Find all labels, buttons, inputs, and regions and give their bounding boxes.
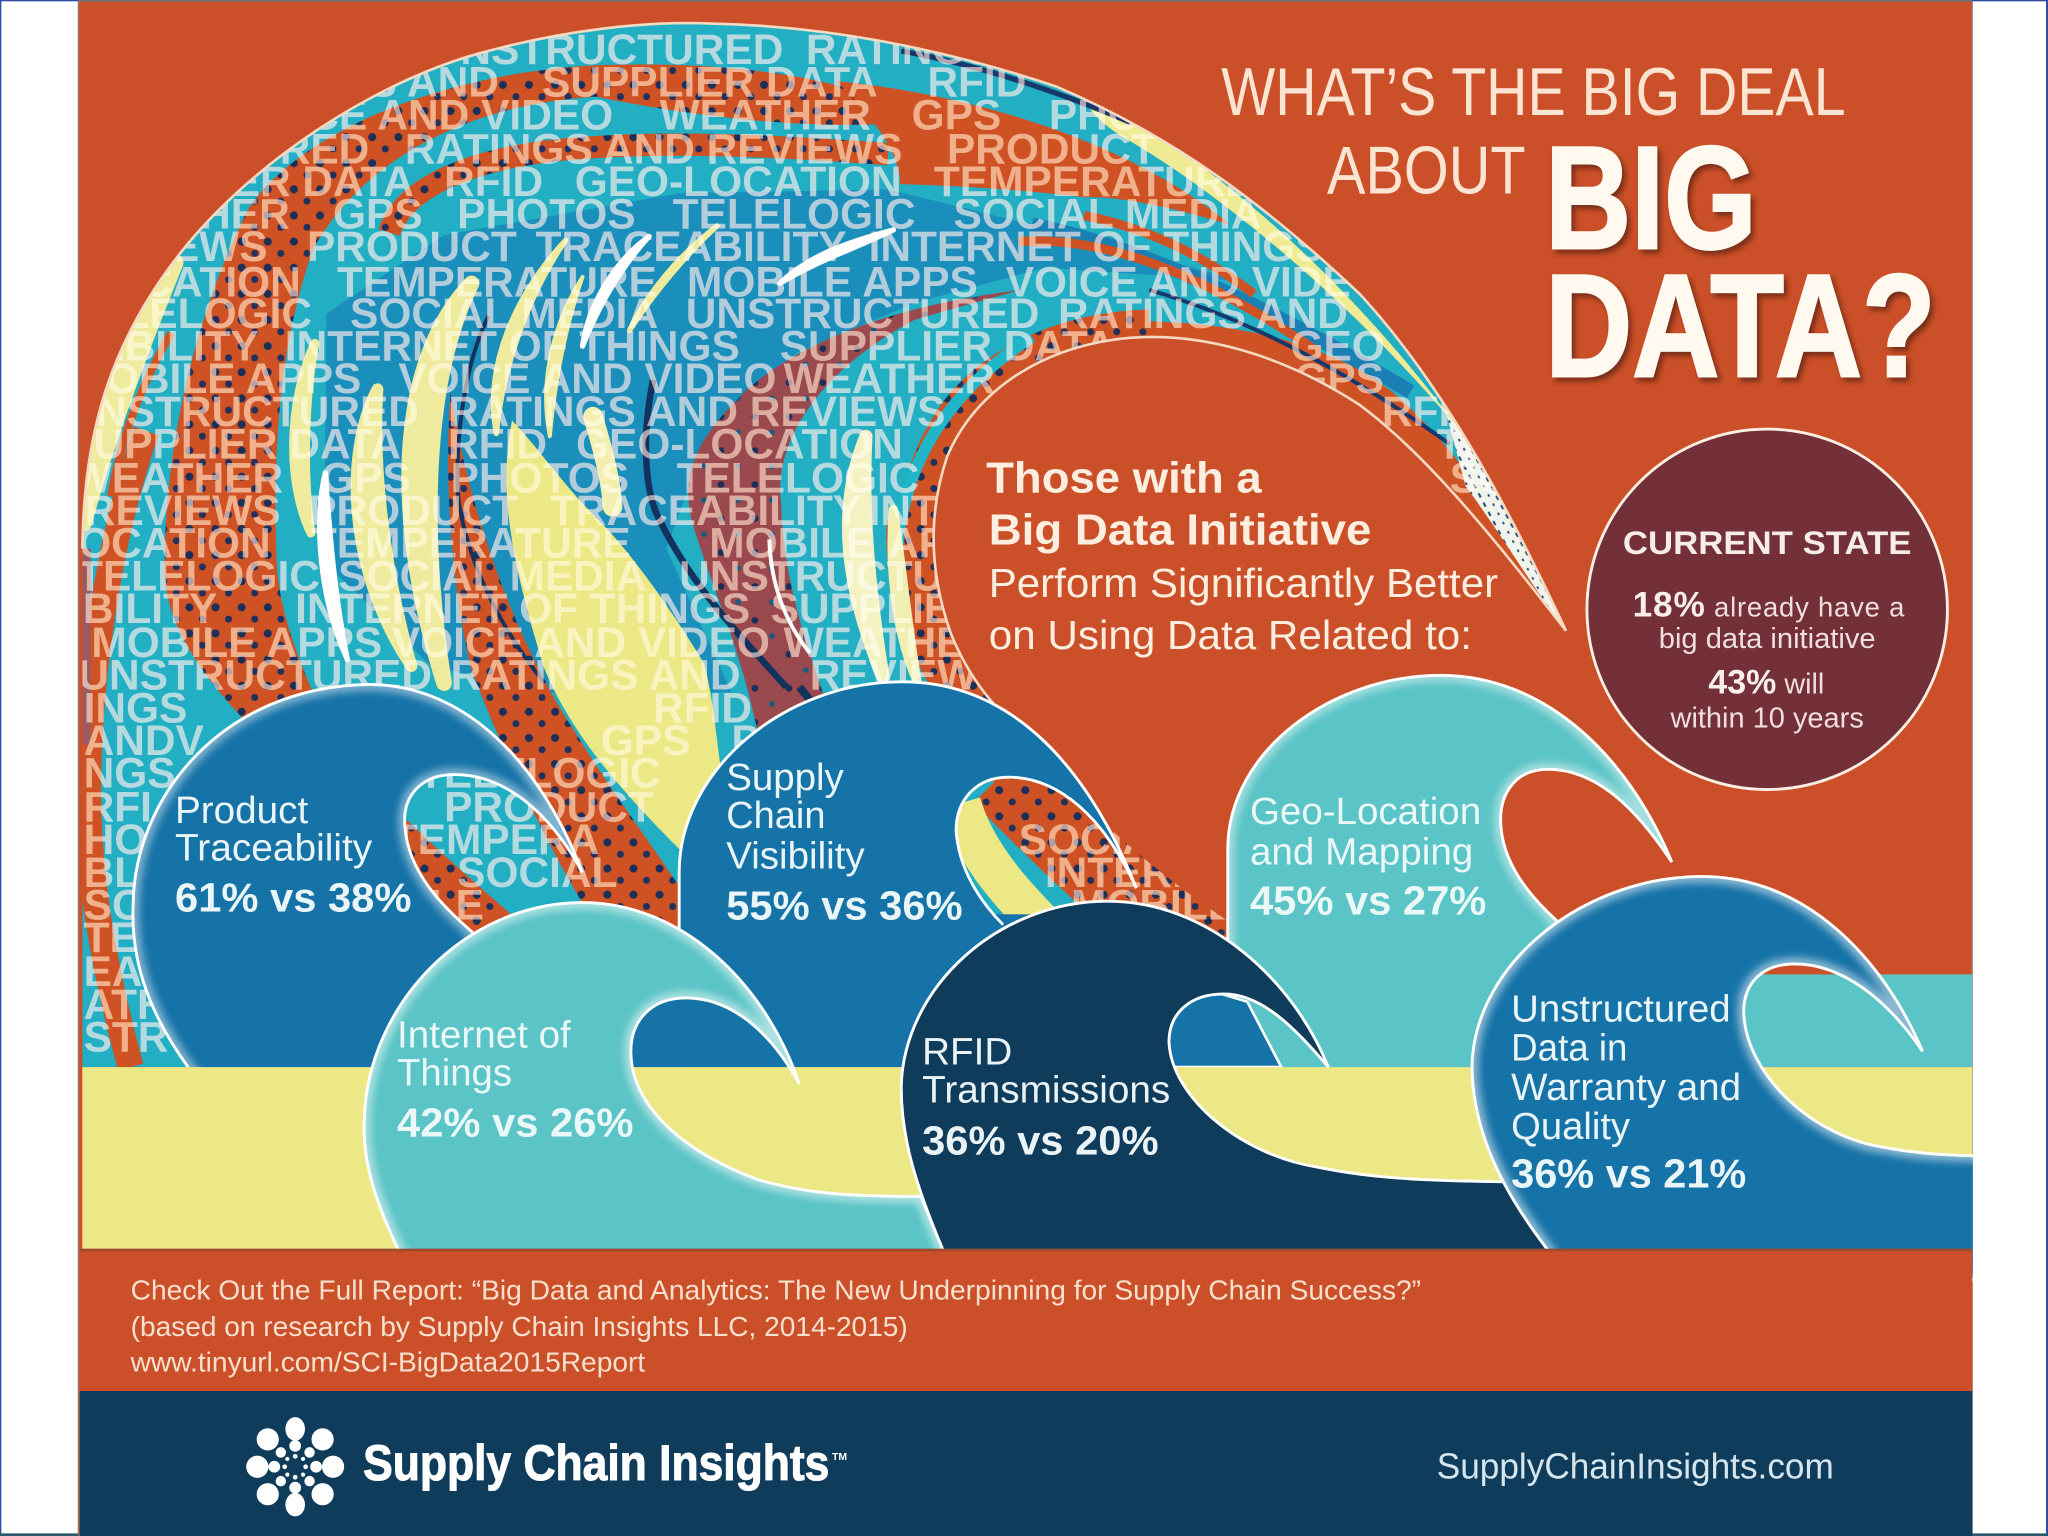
data word rows: MOBILE APPS (91, 619, 382, 666)
text: blob heading (986, 454, 1498, 658)
data word rows: RFID (444, 158, 543, 205)
wave: unstructured data in warranty and quality (1472, 876, 1998, 1280)
data word rows: TEMPERATURE (934, 158, 1254, 205)
data word rows: MOBILE (709, 520, 874, 567)
data word rows: UNSTRUCTURED (16, 125, 369, 172)
footer navy band (80, 1391, 1972, 1536)
wave: geo-location and mapping: and Mapping (1250, 832, 1473, 874)
data word rows: WEATHER (660, 91, 871, 138)
current state circle (1587, 429, 1947, 790)
data word rows: REVIEWS (85, 487, 281, 534)
data word rows: REVIEWS (810, 652, 1006, 699)
footer report band (80, 1249, 1972, 1391)
title: WHAT’S THE BIG DEAL (1221, 55, 1846, 130)
text: blob heading: Big Data Initiative (989, 507, 1371, 555)
data word rows: RATINGS AND (451, 652, 741, 699)
data word rows: RATINGS AND REVIEWS (448, 388, 945, 435)
wave: internet of things (362, 901, 941, 1249)
data word rows: GPS (601, 717, 690, 764)
data word rows: SOCIAL (1450, 454, 1610, 501)
data word rows: INTERNET OF THINGS (285, 322, 740, 369)
data word rows: RFID (653, 684, 752, 731)
logo wordmark: TM (832, 1452, 847, 1463)
data word rows: SUPPLIER DATA (780, 322, 1115, 369)
data word rows: SUPPLIER DATA (542, 59, 878, 106)
data word rows: UNSTRUCTURED (679, 552, 1033, 599)
big data wave (82, 24, 1560, 1067)
data word rows: VOICE AND VIDEO (392, 619, 770, 666)
data word rows: TEMPERATURE (311, 520, 631, 567)
data word rows: GEO-LOCATION (575, 158, 902, 205)
data word rows: RFID (927, 59, 1026, 106)
data word rows: PHOTOS (1049, 91, 1227, 138)
data word rows: TRACEABILITY (550, 487, 861, 534)
data word rows: TELELOGIC (418, 750, 661, 797)
data word rows: GEO-LOCATION (576, 420, 903, 467)
data word rows: BLE (84, 849, 168, 896)
data word rows: PHOTOS (457, 191, 636, 238)
data word rows: RFID (1382, 388, 1481, 435)
data word rows: RFID (448, 420, 547, 467)
data word rows: WEATHER (784, 355, 995, 402)
footer report band: www.tinyurl.com/SCI-BigData2015Report (130, 1346, 646, 1377)
wave: rfid transmissions: 36% vs 20% (922, 1118, 1159, 1164)
data word rows: GPS (333, 191, 423, 238)
teal band at right (1646, 974, 1972, 1067)
data word rows: RATINGS AND (1058, 290, 1348, 337)
data word rows: PHOTOS (731, 717, 910, 764)
wave: rfid transmissions (901, 901, 1567, 1280)
title: DATA? (1545, 244, 1936, 407)
data word rows: GPS (321, 454, 411, 501)
data word rows: PRODUCT (307, 223, 517, 270)
wave: supply chain visibility: Visibility (726, 836, 865, 878)
data word rows: INTERNET (1045, 849, 1257, 896)
wave: geo-location and mapping (1228, 675, 1672, 1097)
wave: product traceability: Product (175, 790, 309, 832)
current state circle: 18% already have a (1633, 585, 1905, 624)
wave: supply chain visibility (522, 682, 1136, 1071)
data word rows: SOCIAL MEDIA (338, 552, 646, 599)
wave: rfid transmissions: RFID (922, 1031, 1012, 1073)
data word rows: PHOTOS (451, 454, 629, 501)
wave: internet of things: Internet of (397, 1015, 571, 1057)
wave: supply chain visibility: 55% vs 36% (726, 883, 963, 929)
data word rows: WEATHER (784, 619, 995, 666)
data word rows: UNSTRUCTURED (78, 652, 432, 699)
data word rows: INTERNET OF THINGS (295, 585, 750, 632)
wave: product traceability: Traceability (175, 828, 372, 870)
data word rows: APPS (888, 520, 1004, 567)
data word rows: PRODUCT (444, 784, 654, 831)
title: BIG (1545, 116, 1757, 279)
text: blob heading: Perform Significantly Better (989, 560, 1498, 606)
data word rows: RATINGS AND REVIEWS (405, 125, 902, 172)
data word rows: TEL (84, 914, 164, 961)
text: blob heading: on Using Data Related to: (989, 612, 1472, 658)
wave: unstructured data in warranty and quality: 36% vs 21% (1511, 1150, 1746, 1196)
data word rows: GPS (912, 91, 1001, 138)
data word rows: SUPPLIER DATA (78, 158, 414, 205)
current state circle: CURRENT STATE (1623, 524, 1912, 561)
data word rows: INTERNET (869, 487, 1081, 534)
wave: product traceability (133, 684, 583, 1097)
icon: supply chain insights logo (246, 1417, 344, 1516)
wave: unstructured data in warranty and quality: Data in (1511, 1028, 1627, 1070)
title: ABOUT (1327, 133, 1526, 208)
data word rows: TRACEABILITY (536, 223, 847, 270)
data word rows: ABILITY (52, 585, 217, 632)
wave: geo-location and mapping: Geo-Location (1250, 791, 1481, 833)
data word rows: SUPPLIER (771, 585, 983, 632)
current state circle: within 10 years (1670, 703, 1864, 735)
current state circle: big data initiative (1659, 623, 1876, 655)
data word rows: TEMPERATURE (337, 258, 657, 305)
data word rows: WEATHER (72, 454, 283, 501)
data word rows: UNSTRUCTURED (65, 388, 419, 435)
data word rows: STR (84, 1013, 168, 1060)
data word rows: RFI (84, 784, 152, 831)
data word rows: SUPPLIER DATA (65, 420, 401, 467)
data word rows: ILE (418, 882, 484, 929)
data word rows: EA (84, 948, 143, 995)
data word rows: TEMPERA (392, 816, 599, 863)
data word rows: TELELOGIC (673, 191, 915, 238)
data word rows: SOCIAL (1019, 816, 1179, 863)
data word rows: REVIEWS (72, 223, 268, 270)
footer report band: Check Out the Full Report: “Big Data and Analytics: The New Underpinning for Supply Chain Success?” (131, 1275, 1421, 1306)
current state circle: 43% will (1708, 664, 1824, 702)
footer report band: (based on research by Supply Chain Insights LLC, 2014-2015) (131, 1311, 908, 1342)
data word rows: INGS (84, 684, 187, 731)
data word rows: TEMP (1437, 420, 1555, 467)
data word rows: GPS (1294, 355, 1384, 402)
data word rows (82, 34, 1495, 1052)
data word rows: MOBILE (1071, 882, 1236, 929)
wave: supply chain visibility: Supply (726, 757, 844, 799)
data word rows: ATH (84, 981, 168, 1028)
data word rows: GEO (1290, 322, 1385, 369)
data word rows: UNSTRUCTURED (686, 290, 1039, 337)
website: SupplyChainInsights.com (1437, 1446, 1834, 1487)
data word rows: SOC (84, 882, 176, 929)
wave: geo-location and mapping: 45% vs 27% (1250, 877, 1486, 923)
wave: supply chain visibility: Chain (726, 795, 825, 837)
data word rows: GEO (1084, 59, 1178, 106)
data word rows: INTERNET OF THINGS (869, 223, 1324, 270)
data word rows: WEATHER (78, 191, 290, 238)
data word rows: MOBILE APPS (71, 355, 361, 402)
data word rows: MOBILE APPS (687, 258, 978, 305)
data word rows: RATINGS AND (209, 59, 499, 106)
data word rows: SOCIAL MEDIA (953, 191, 1262, 238)
data word rows: NGS (84, 750, 176, 797)
wave: unstructured data in warranty and quality: Warranty and (1511, 1067, 1741, 1109)
data word rows: ANDV (84, 717, 205, 764)
wave: internet of things: Things (397, 1052, 512, 1094)
wave: product traceability: 61% vs 38% (175, 875, 411, 921)
data word rows: PRODUCT (308, 487, 518, 534)
title (1221, 55, 1936, 407)
data word rows: VOICE AND VIDEO (1006, 258, 1384, 305)
data word rows: TELELOGIC (677, 454, 919, 501)
text: blob heading: Those with a (986, 454, 1263, 502)
data word rows: TELELOGIC (69, 290, 312, 337)
blue wedge inside RFID curl (1045, 940, 1281, 1067)
wave: internet of things: 42% vs 26% (397, 1099, 633, 1145)
data word rows: SOCIAL (457, 849, 617, 896)
wave: rfid transmissions: Transmissions (922, 1069, 1170, 1111)
data word rows: HOTO (84, 816, 205, 863)
data word rows: UNSTRUCTURED (430, 26, 783, 73)
data word rows: LOCATION (52, 520, 271, 567)
data word rows: VOICE AND VIDEO (398, 355, 776, 402)
wave: unstructured data in warranty and quality: Quality (1511, 1106, 1630, 1148)
wave: unstructured data in warranty and quality: Unstructured (1511, 988, 1731, 1030)
sand strip (82, 1067, 1972, 1250)
wave outline (82, 23, 1566, 744)
data word rows: TELELOGIC (77, 552, 320, 599)
data word rows: RATINGS AND (806, 26, 1096, 73)
data word rows: VOICE AND VIDEO (235, 91, 613, 138)
logo wordmark: Supply Chain Insights (363, 1435, 829, 1491)
data word rows: PRODUCT (947, 125, 1157, 172)
data word rows: SOCIAL MEDIA (350, 290, 658, 337)
